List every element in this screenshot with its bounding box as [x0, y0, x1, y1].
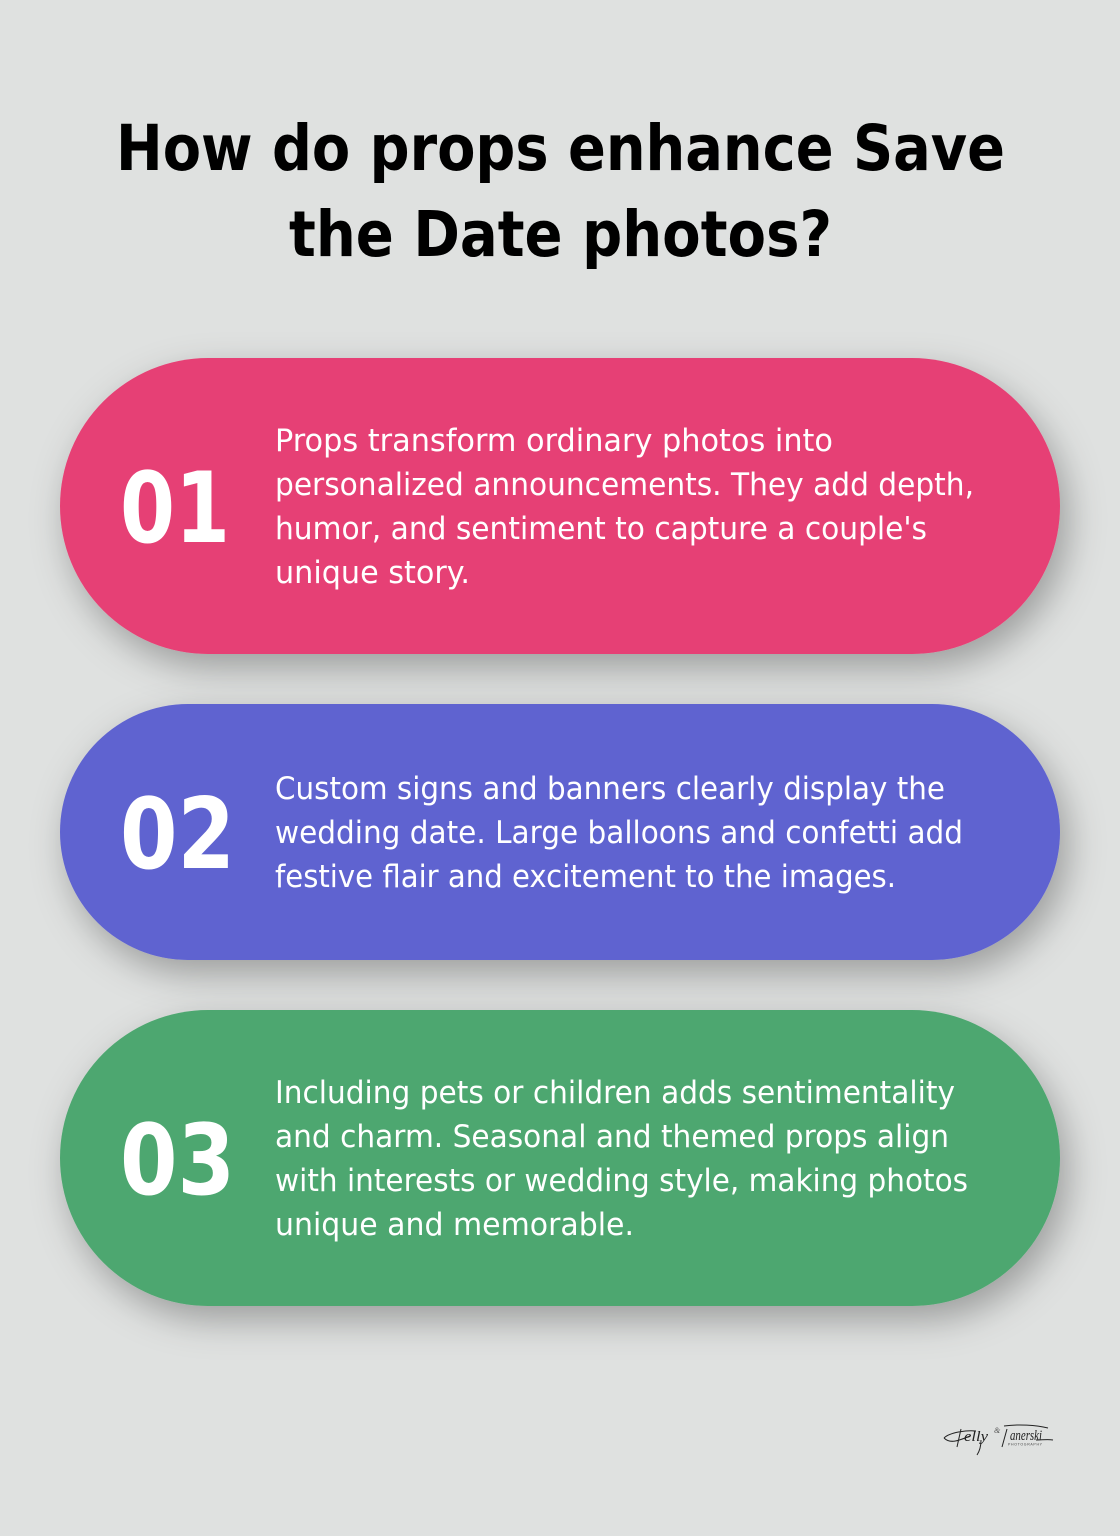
blue pill background	[60, 704, 1060, 960]
title: the Date photos?	[289, 198, 832, 271]
step 01 text: Props transform ordinary photos into	[275, 423, 833, 459]
step 01 text: unique story.	[275, 555, 470, 591]
logo: signature	[944, 1425, 1053, 1455]
logo: signature: PHOTOGRAPHY	[1008, 1442, 1043, 1446]
step 02 text: wedding date. Large balloons and confetti add	[275, 815, 963, 851]
panel: step 01	[60, 358, 1060, 654]
step 03 text: unique and memorable.	[275, 1207, 634, 1243]
step 03 text: Including pets or children adds sentimentality	[275, 1075, 955, 1111]
logo: signature: anerski	[1010, 1428, 1042, 1444]
number 03: 03	[120, 1104, 235, 1218]
panel: step 03	[60, 1010, 1060, 1306]
pink pill background	[60, 358, 1060, 654]
step 03 text: with interests or wedding style, making photos	[275, 1163, 968, 1199]
step 02 text: Custom signs and banners clearly display the	[275, 771, 945, 807]
number 02: 02	[120, 778, 235, 892]
number 01: 01	[120, 452, 230, 566]
step 01 text	[275, 423, 974, 591]
step 01 text: humor, and sentiment to capture a couple's	[275, 511, 927, 547]
step 03 text	[275, 1075, 968, 1243]
step 02 text: festive flair and excitement to the images.	[275, 859, 896, 895]
title	[116, 112, 1005, 271]
title: How do props enhance Save	[116, 112, 1005, 185]
panel: step 02	[60, 704, 1060, 960]
step 02 text	[275, 771, 963, 895]
green pill background	[60, 1010, 1060, 1306]
step 03 text: and charm. Seasonal and themed props align	[275, 1119, 949, 1155]
logo: signature: &	[994, 1426, 1001, 1435]
logo: signature: elly	[964, 1429, 988, 1445]
step 01 text: personalized announcements. They add depth,	[275, 467, 974, 503]
